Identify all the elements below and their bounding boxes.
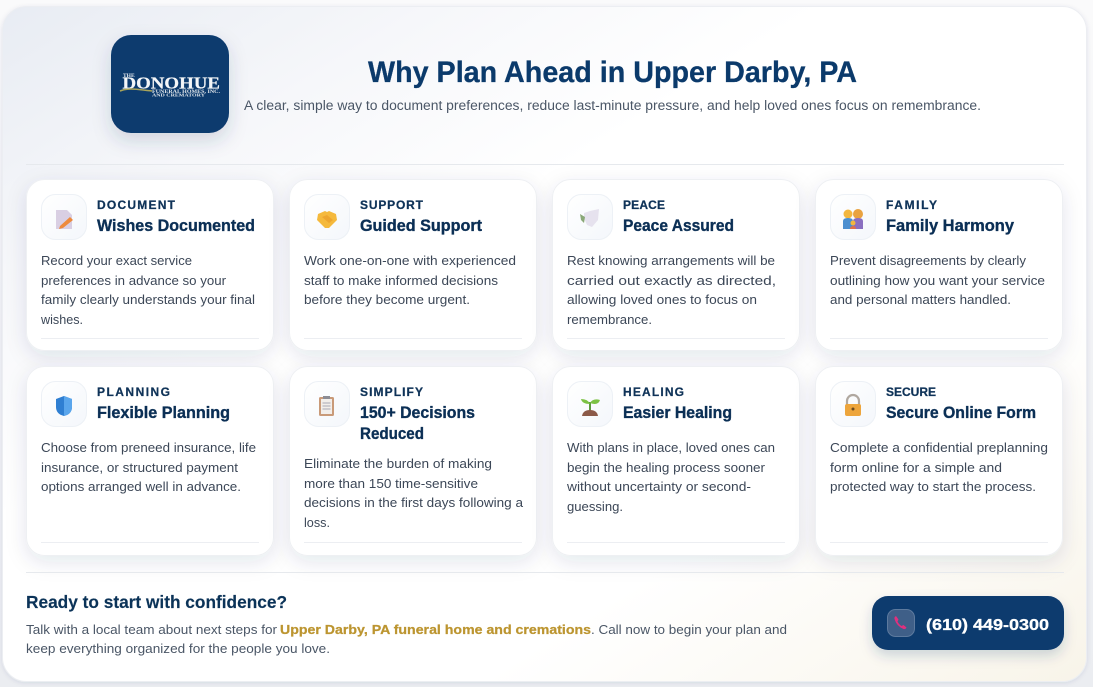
header logo: THE bbox=[123, 73, 135, 79]
kicker: SIMPLIFY bbox=[360, 385, 423, 399]
card text: Record your exact service bbox=[41, 253, 192, 268]
card title: Wishes Documented bbox=[97, 217, 255, 235]
card: Peace Assured bbox=[552, 180, 800, 350]
card text: Complete a confidential preplanning bbox=[830, 440, 1048, 455]
kicker: HEALING bbox=[623, 385, 684, 399]
card: Family Harmony bbox=[816, 180, 1062, 350]
card text bbox=[304, 253, 516, 307]
icon: seedling bbox=[568, 382, 612, 426]
card title: Peace Assured bbox=[623, 217, 734, 235]
header logo bbox=[111, 35, 229, 133]
card text: wishes. bbox=[40, 312, 83, 327]
kicker: PLANNING bbox=[97, 385, 170, 399]
card title: Easier Healing bbox=[623, 404, 732, 422]
icon: padlock bbox=[830, 382, 876, 426]
card text bbox=[304, 456, 524, 530]
card text: Work one-on-one with experienced bbox=[304, 253, 516, 268]
card text: remembrance. bbox=[567, 312, 652, 327]
card: Flexible Planning bbox=[26, 366, 274, 556]
kicker: DOCUMENT bbox=[97, 198, 176, 212]
icon: handshake bbox=[304, 194, 350, 240]
card text: With plans in place, loved ones can bbox=[567, 440, 775, 455]
card text bbox=[40, 253, 255, 327]
card text bbox=[567, 253, 776, 327]
card text bbox=[830, 253, 1045, 307]
title: Why Plan Ahead in Upper Darby, PA bbox=[368, 56, 857, 89]
card text: protected way to start the process. bbox=[830, 479, 1036, 494]
card text: preferences in advance so your bbox=[41, 273, 227, 288]
icon: family bbox=[830, 194, 876, 240]
card title: Family Harmony bbox=[886, 217, 1014, 235]
card text: begin the healing process sooner bbox=[567, 460, 766, 475]
card text: carried out exactly as directed, bbox=[567, 273, 776, 288]
card title: Flexible Planning bbox=[97, 404, 230, 422]
card title bbox=[360, 404, 475, 443]
footer heading: Ready to start with confidence? bbox=[26, 592, 287, 612]
footer text: Talk with a local team about next steps for bbox=[26, 622, 278, 637]
card text: loss. bbox=[304, 515, 330, 530]
subtitle: A clear, simple way to document preferences, reduce last-minute pressure, and help loved ones focus on remembrance. bbox=[244, 98, 981, 113]
kicker: SECURE bbox=[886, 385, 936, 399]
icon: shield bbox=[42, 382, 86, 426]
card text: allowing loved ones to focus on bbox=[567, 292, 757, 307]
footer text: keep everything organized for the people you love. bbox=[26, 641, 330, 656]
card text: guessing. bbox=[567, 499, 623, 514]
icon: phone bbox=[888, 610, 914, 636]
card text bbox=[41, 440, 256, 494]
kicker: SUPPORT bbox=[360, 198, 424, 212]
card title: Secure Online Form bbox=[886, 404, 1036, 422]
card text: Choose from preneed insurance, life bbox=[41, 440, 256, 455]
card text: staff to make informed decisions bbox=[304, 273, 498, 288]
header logo: FUNERAL HOMES, INC. bbox=[152, 90, 221, 95]
card text: Rest knowing arrangements will be bbox=[567, 253, 775, 268]
card: Secure Online Form bbox=[816, 366, 1062, 556]
card text: without uncertainty or second- bbox=[566, 479, 751, 494]
icon: dove bbox=[568, 194, 612, 240]
card text: Prevent disagreements by clearly bbox=[830, 253, 1026, 268]
header logo: DONOHUE bbox=[122, 74, 220, 92]
footer text: Upper Darby, PA funeral home and cremations bbox=[280, 622, 591, 637]
card text: more than 150 time-sensitive bbox=[304, 476, 478, 491]
card text: and personal matters handled. bbox=[830, 292, 1011, 307]
card text: Eliminate the burden of making bbox=[304, 456, 492, 471]
card text: form online for a simple and bbox=[830, 460, 1002, 475]
card text: options arranged well in advance. bbox=[41, 479, 241, 494]
card text bbox=[830, 440, 1048, 494]
icon: document and pencil bbox=[42, 194, 86, 240]
card title: Reduced bbox=[360, 425, 424, 443]
footer text bbox=[26, 622, 787, 656]
card text: decisions in the first days following a bbox=[304, 495, 524, 510]
header logo: AND CREMATORY bbox=[152, 92, 206, 97]
phone number: (610) 449-0300 bbox=[926, 617, 1049, 634]
card text: insurance, or structured payment bbox=[41, 460, 238, 475]
kicker: PEACE bbox=[623, 198, 665, 212]
card: Easier Healing bbox=[552, 366, 800, 556]
card title: Guided Support bbox=[360, 217, 483, 235]
icon: clipboard bbox=[304, 382, 350, 426]
footer text: . Call now to begin your plan and bbox=[591, 622, 787, 637]
kicker: FAMILY bbox=[886, 198, 937, 212]
card text: before they become urgent. bbox=[304, 292, 470, 307]
card: Guided Support bbox=[290, 180, 536, 350]
card text bbox=[566, 440, 775, 514]
card text: outlining how you want your service bbox=[830, 273, 1045, 288]
card title: 150+ Decisions bbox=[360, 404, 475, 422]
card: 150+ Decisions Reduced bbox=[290, 366, 536, 556]
call button bbox=[872, 596, 1064, 650]
card: Wishes Documented bbox=[26, 180, 274, 350]
card text: family clearly understands your final bbox=[41, 292, 255, 307]
